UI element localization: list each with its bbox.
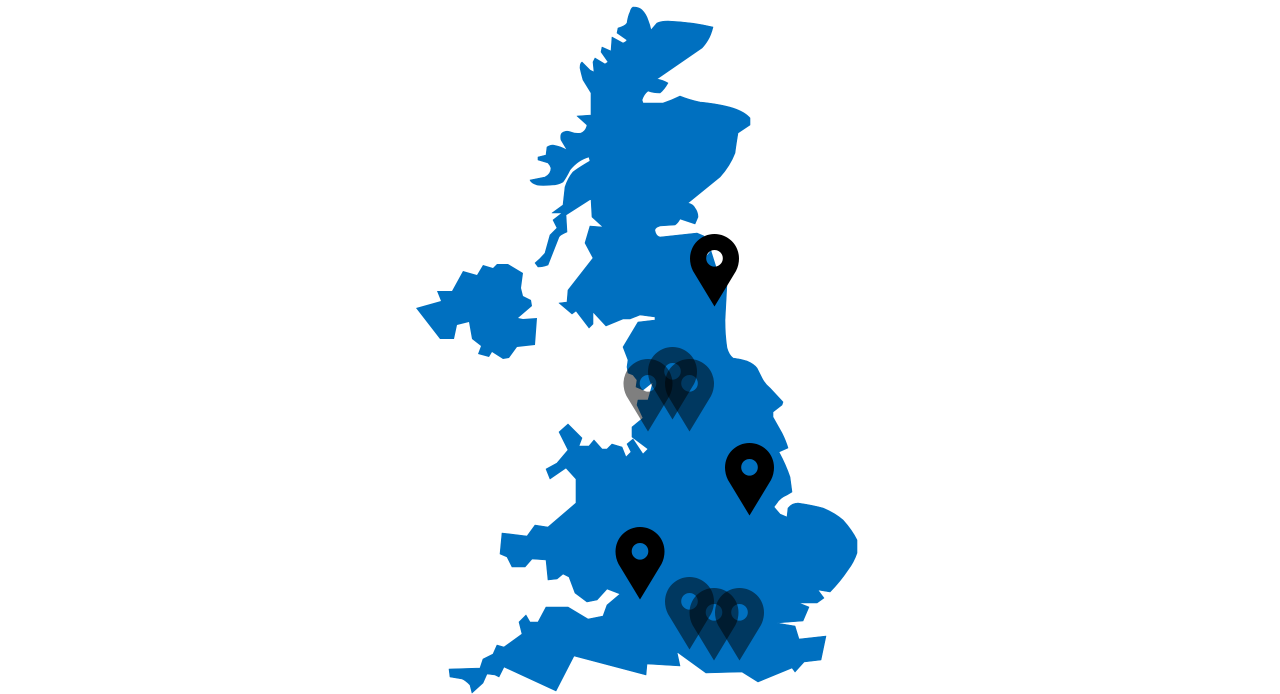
pin: east midlands xyxy=(725,443,774,516)
pin: Newcastle xyxy=(690,234,739,306)
pin: west midlands xyxy=(616,527,664,600)
pin: north-west centre xyxy=(648,347,697,420)
pin: north-west left xyxy=(624,359,672,432)
pin: south right xyxy=(715,588,764,660)
pin: north-west right xyxy=(665,359,714,432)
pin: south centre xyxy=(690,588,738,660)
map: Northern Ireland xyxy=(416,264,537,359)
pin: south left xyxy=(665,577,714,650)
map: Great Britain xyxy=(449,7,857,693)
